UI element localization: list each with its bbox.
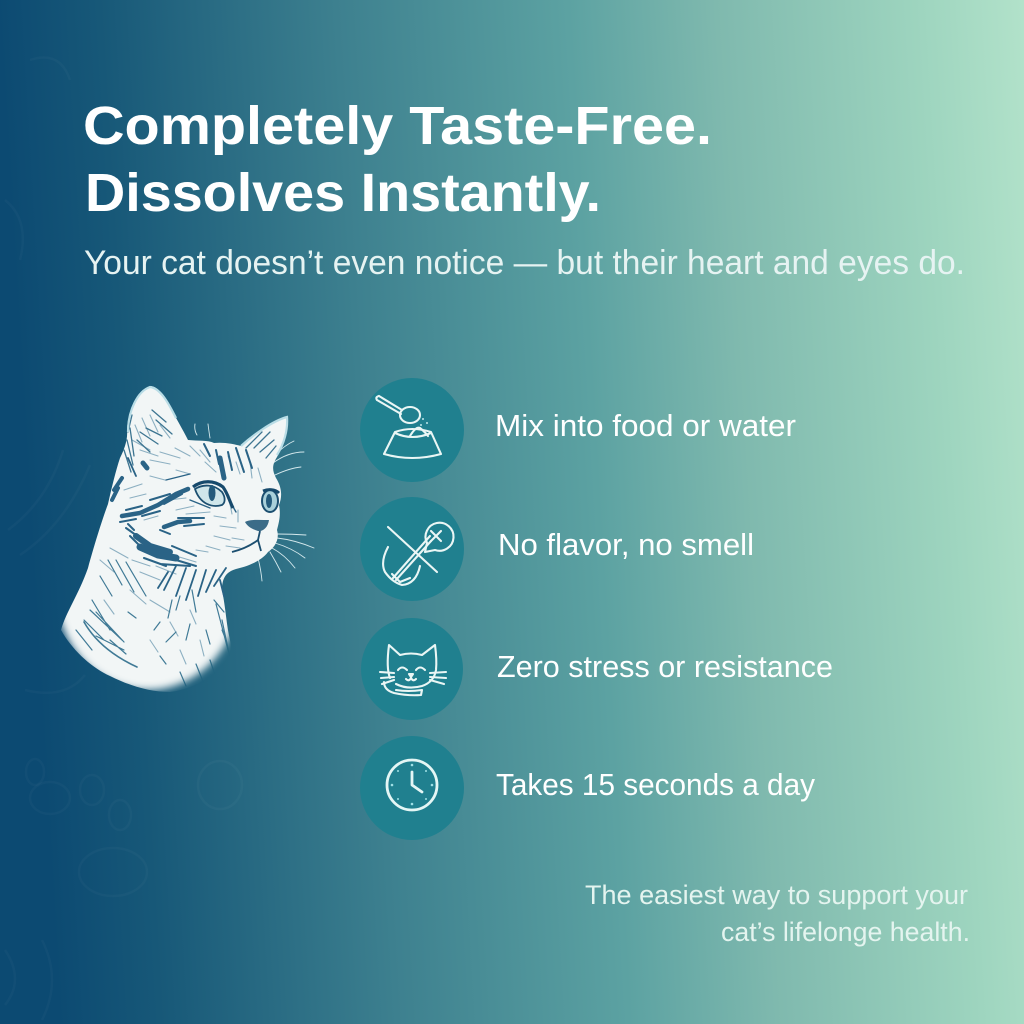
closing note <box>585 880 970 947</box>
cat body with fade <box>61 386 287 692</box>
cat right eye <box>262 490 279 512</box>
cat nose and mouth <box>232 520 269 552</box>
cat tabby stripes <box>112 444 252 600</box>
item label: Zero stress or resistance <box>497 650 833 684</box>
closing note: cat’s lifelonge health. <box>721 917 970 947</box>
icon: spoon and bowl <box>360 378 464 482</box>
icon: clock <box>360 736 464 840</box>
list item 4: takes 15 seconds a day <box>360 736 816 840</box>
closing note: The easiest way to support your <box>585 880 968 910</box>
item label: Takes 15 seconds a day <box>496 768 816 802</box>
background faint paw pattern <box>5 58 242 1020</box>
cat ear outlines <box>128 387 287 455</box>
cat ear shading <box>124 410 276 472</box>
cat neck and chest hatching <box>76 560 230 686</box>
item label: Mix into food or water <box>495 409 796 443</box>
cat whiskers <box>195 424 314 581</box>
title: Dissolves Instantly. <box>85 163 601 223</box>
list item 2: no flavor, no smell <box>360 497 754 601</box>
subtitle: Your cat doesn’t even notice — but their heart and eyes do. <box>84 244 965 282</box>
cat silhouette <box>61 386 287 692</box>
title: Completely Taste-Free. <box>83 96 712 156</box>
icon: crossed out nose and speech bubble <box>360 497 464 601</box>
icon: happy cat <box>361 618 463 720</box>
illustration: cat portrait <box>61 386 314 692</box>
list item 3: zero stress or resistance <box>361 618 833 720</box>
cat left eye <box>193 482 233 508</box>
list item 1: mix into food or water <box>360 378 796 482</box>
title <box>83 96 712 223</box>
cat light tone fur <box>100 415 262 664</box>
item label: No flavor, no smell <box>498 528 754 562</box>
